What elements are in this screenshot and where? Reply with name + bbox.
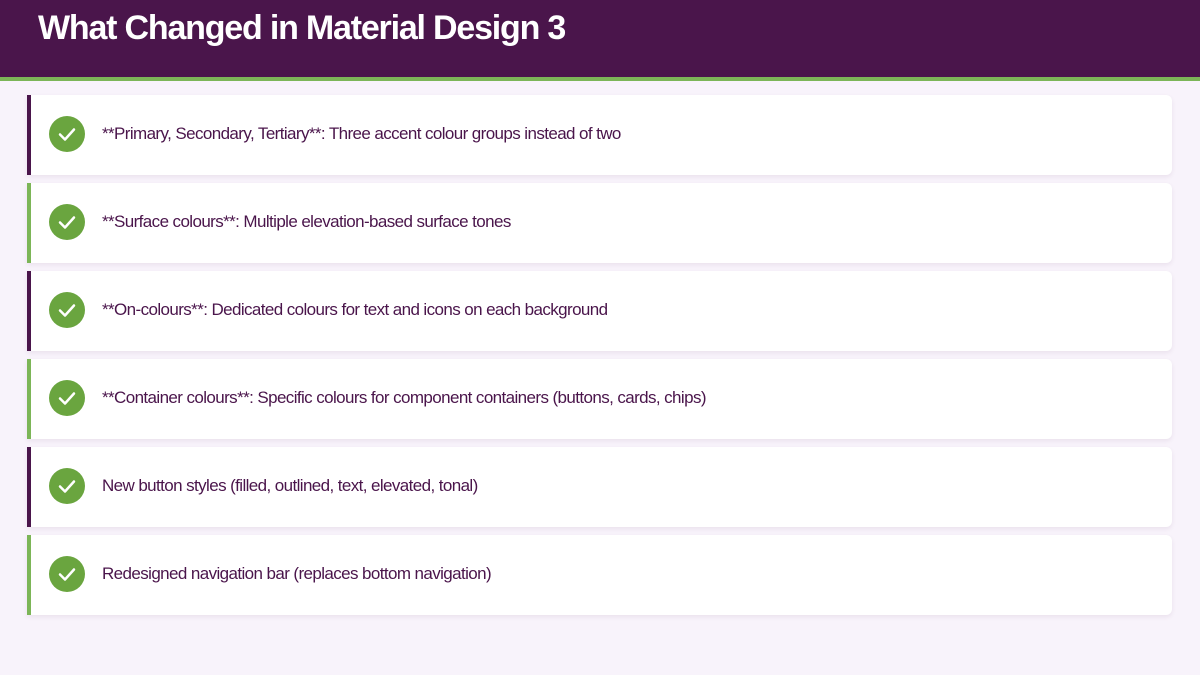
text: Redesigned navigation bar (replaces bottom navigation) [102,564,491,583]
text: **Container colours**: Specific colours for component containers (buttons, cards, chips) [102,388,706,407]
icon: check [49,116,85,152]
text: **On-colours**: Dedicated colours for text and icons on each background [102,300,608,319]
card 3 [27,271,1172,351]
header [0,0,1200,81]
icon: check [49,292,85,328]
text: **Primary, Secondary, Tertiary**: Three accent colour groups instead of two [102,124,621,143]
card 5 [27,447,1172,527]
card 6 [27,535,1172,615]
icon: check [49,380,85,416]
card 1 [27,95,1172,175]
title: What Changed in Material Design 3 [38,9,565,47]
card 4 [27,359,1172,439]
text: New button styles (filled, outlined, text, elevated, tonal) [102,476,478,495]
card 2 [27,183,1172,263]
icon: check [49,556,85,592]
text: **Surface colours**: Multiple elevation-based surface tones [102,212,511,231]
icon: check [49,468,85,504]
icon: check [49,204,85,240]
